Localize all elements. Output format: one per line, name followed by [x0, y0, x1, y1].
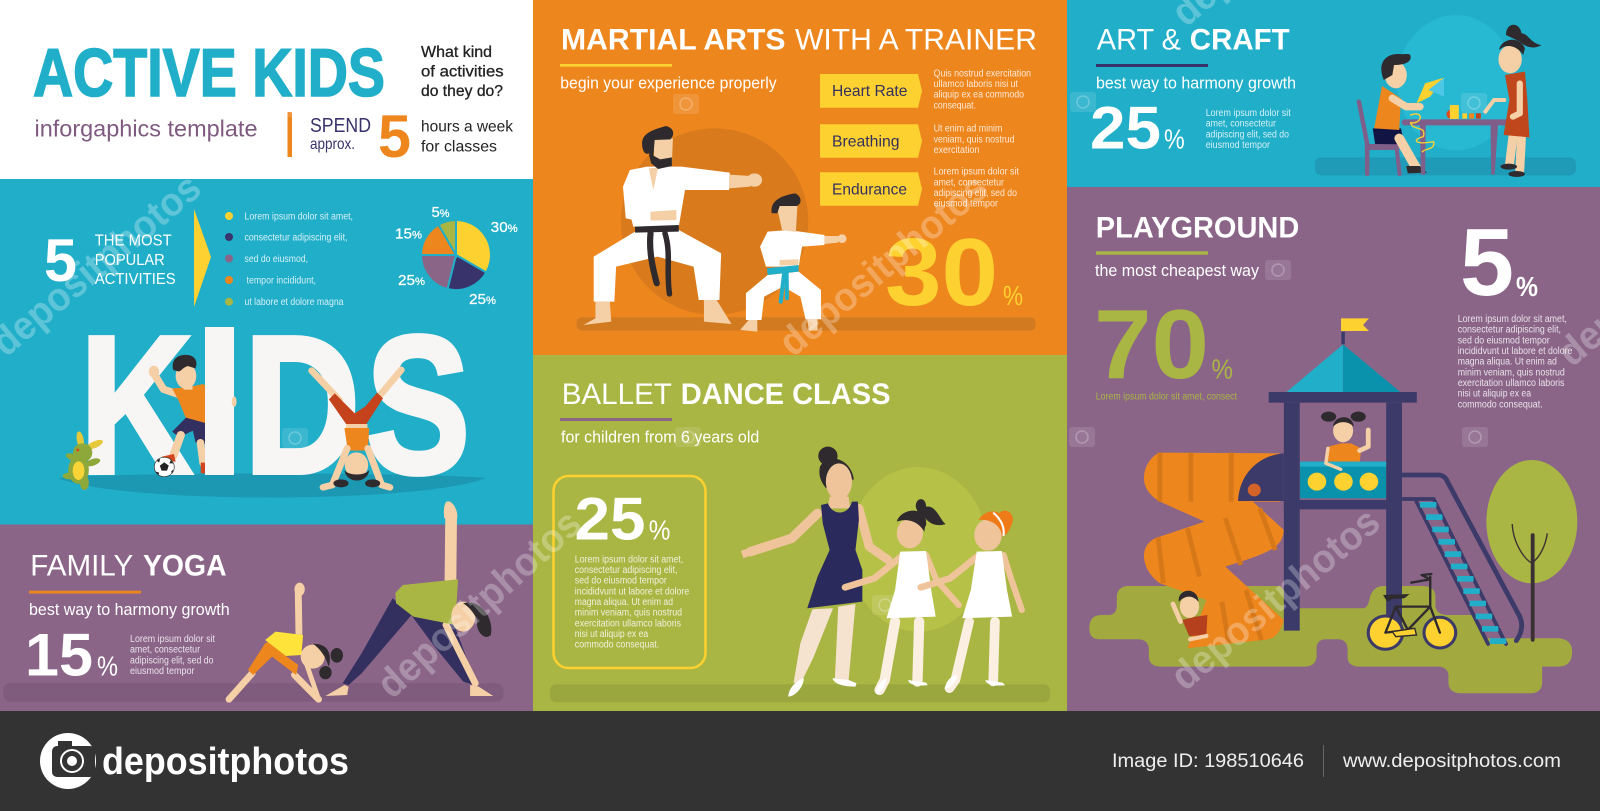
tag: breathing: Breathing [832, 134, 900, 151]
icon: children crafting at table [1315, 15, 1576, 177]
callout box: commodo consequat. [575, 640, 659, 651]
heading: BALLET [562, 378, 672, 411]
letters I D S: S [366, 296, 470, 514]
pie labels: 25% [469, 291, 496, 308]
orange divider [288, 112, 292, 157]
description: breathing: Ut enim ad minim [934, 124, 1002, 135]
slide [1144, 453, 1284, 648]
description: heart rate [934, 68, 1031, 111]
description [1206, 108, 1291, 151]
heading: WITH A TRAINER [795, 23, 1037, 56]
stat 70%: 70 [1094, 289, 1209, 399]
tag: endurance [820, 172, 922, 206]
heading [30, 549, 227, 582]
description: minim veniam, quis nostrud [1458, 367, 1565, 378]
description: adipiscing elit, sed do [130, 655, 214, 666]
stat 15%: % [97, 651, 118, 682]
pie labels: 30% [491, 219, 518, 236]
popular activities heading: ACTIVITIES [95, 271, 176, 288]
description: heart rate: aliquip ex ea commodo [934, 90, 1024, 101]
ladder and rails [1403, 475, 1522, 644]
question text: do they do? [421, 83, 503, 100]
spend label: SPEND [310, 115, 371, 137]
footer bar [0, 711, 1600, 811]
stat 5%: 5 [1460, 209, 1514, 316]
stat 15%: 15 [25, 622, 93, 689]
description: amet, consectetur [1206, 119, 1277, 130]
letter K: K [80, 296, 192, 514]
heading [1097, 23, 1290, 56]
panel: martial arts [533, 0, 1067, 355]
underline [1096, 64, 1208, 67]
callout box [554, 476, 706, 668]
stat 5%: % [1516, 271, 1538, 302]
description: endurance [934, 167, 1019, 210]
callout box: magna aliqua. Ut enim ad [575, 597, 673, 608]
hours text: for classes [421, 138, 497, 155]
icon: ballet teacher and students [550, 447, 1050, 702]
boy at slide exit [1173, 591, 1207, 639]
ground shadow [58, 474, 486, 498]
tree [1486, 460, 1577, 642]
legend: Lorem ipsum dolor sit amet, [244, 212, 353, 222]
hours text: hours a week [421, 119, 514, 136]
image id: Image ID: 198510646 [1112, 751, 1304, 772]
tag: heart rate: Heart Rate [832, 83, 907, 100]
callout box: sed do eiusmod tempor [575, 576, 667, 587]
stat 30%: % [1003, 280, 1023, 311]
big number 5: 5 [378, 103, 411, 170]
callout box: incididvunt ut labore et dolore [575, 586, 690, 597]
description: Lorem ipsum dolor sit [1206, 108, 1291, 119]
subheading: the most cheapest way [1095, 262, 1260, 280]
icon: karate trainer and child [576, 126, 1036, 332]
question text [421, 44, 504, 100]
underline [1096, 251, 1208, 255]
watermark overlay: depositphotos [1163, 499, 1388, 699]
heading: MARTIAL ARTS [561, 23, 786, 56]
description: heart rate: consequat. [934, 100, 976, 111]
subheading: begin your experience properly [560, 74, 777, 92]
spend label [310, 115, 371, 153]
heading [561, 23, 1037, 56]
legend: ut labore et dolore magna [244, 297, 344, 308]
letters I D S: D [244, 296, 360, 514]
title: ACTIVE KIDS [33, 35, 385, 111]
tag: heart rate [820, 74, 922, 108]
description: nisi ut aliquip ex ea [1458, 389, 1531, 400]
stat 30%: 30 [885, 219, 998, 326]
legend: tempor incididunt, [246, 276, 316, 286]
subheading: for children from 6 years old [561, 429, 759, 447]
subheading: best way to harmony growth [1096, 74, 1296, 92]
description: heart rate: ullamco laboris nisi ut [934, 79, 1018, 90]
description [130, 634, 215, 677]
tower [1238, 318, 1417, 633]
heading: FAMILY [30, 549, 133, 582]
logo wordmark: depositphotos [102, 741, 349, 783]
tag: endurance: Endurance [832, 181, 907, 198]
description: endurance: eiusmod tempor [934, 199, 999, 210]
callout box: exercitation ullamco laboris [575, 618, 681, 629]
heading [562, 378, 890, 411]
description: amet, consectetur [130, 645, 201, 656]
callout box: 25 [574, 485, 646, 552]
description: commodo consequat. [1458, 399, 1543, 410]
panel: playground [1067, 187, 1600, 711]
panel: header [0, 0, 533, 179]
heading: YOGA [143, 549, 227, 582]
tag: breathing [820, 124, 922, 158]
description: eiusmod tempor [1206, 140, 1271, 151]
panel: art and craft [1067, 0, 1600, 187]
girl in tower [1321, 412, 1368, 463]
heading: CRAFT [1190, 23, 1290, 56]
popular activities heading: THE MOST [95, 233, 172, 250]
letters I D S [205, 296, 470, 514]
website: www.depositphotos.com [1342, 751, 1561, 772]
caption: Lorem ipsum dolor sit amet, consect [1096, 391, 1237, 402]
heading: PLAYGROUND [1096, 211, 1299, 244]
pie labels: 5% [432, 204, 450, 221]
underline [560, 418, 672, 421]
stat 25%: % [1164, 123, 1185, 154]
stat 5% [1460, 209, 1538, 316]
description [1458, 314, 1573, 410]
underline [29, 591, 141, 594]
callout box: minim veniam, quis nostrud [575, 608, 682, 619]
subheading: best way to harmony growth [29, 601, 230, 619]
yellow arrow [194, 209, 211, 307]
spend label: approx. [310, 136, 355, 153]
underline [560, 64, 672, 67]
description: heart rate: Quis nostrud exercitation [934, 68, 1031, 79]
pie labels [395, 204, 518, 308]
pie labels: 15% [395, 226, 422, 243]
callout box: nisi ut aliquip ex ea [575, 629, 649, 640]
popular activities heading [95, 233, 176, 288]
description: magna aliqua. Ut enim ad [1458, 357, 1557, 368]
description: eiusmod tempor [130, 666, 195, 677]
watermark overlay: depositphotos [369, 501, 590, 707]
description: consectetur adipiscing elit, [1458, 325, 1561, 336]
panel: most popular activities and kids lettering [0, 179, 533, 525]
stat 25%: 25 [1090, 94, 1161, 161]
description: incididvunt ut labore et dolore [1458, 346, 1573, 357]
divider [1323, 745, 1324, 777]
heading: DANCE CLASS [681, 378, 890, 411]
panel: family yoga [0, 501, 533, 712]
legend: sed do eiusmod, [244, 254, 308, 265]
icon: camera logo [40, 733, 96, 789]
description: breathing: exercitation [934, 145, 979, 156]
description: endurance: adipiscing elit, sed do [934, 188, 1017, 199]
grass [1089, 586, 1572, 693]
description: adipiscing elit, sed do [1206, 129, 1289, 140]
heading: ART & [1097, 23, 1181, 56]
callout box: consectetur adipiscing elit, [575, 565, 678, 576]
question text: of activities [421, 64, 504, 81]
stat 70%: % [1212, 354, 1233, 385]
watermark overlay: depositphotos [771, 165, 996, 365]
pie chart [421, 220, 491, 290]
bicycle [1368, 574, 1456, 649]
subtitle: inforgaphics template [34, 116, 258, 142]
icon: boy with ball [149, 355, 207, 477]
pie labels: 25% [398, 272, 425, 289]
description: Lorem ipsum dolor sit amet, [1458, 314, 1567, 325]
icon: bunny toy and handstand girl [63, 370, 401, 490]
big number 5 white: 5 [44, 227, 77, 294]
description: endurance: amet, consectetur [934, 177, 1005, 188]
description: breathing [934, 124, 1014, 156]
legend: consectetur adipiscing elit, [244, 232, 348, 244]
description: sed do eiusmod tempor [1458, 335, 1550, 346]
tower window [1300, 448, 1386, 498]
description: exercitation ullamco laboris [1458, 378, 1564, 389]
description: breathing: veniam, quis nostrud [934, 134, 1014, 145]
callout box: Lorem ipsum dolor sit amet, [575, 554, 683, 565]
description: endurance: Lorem ipsum dolor sit [934, 167, 1019, 178]
popular activities heading: POPULAR [95, 252, 165, 269]
hours text [421, 119, 514, 155]
question text: What kind [421, 44, 492, 61]
panel: ballet dance class [533, 355, 1067, 711]
description: Lorem ipsum dolor sit [130, 634, 215, 645]
legend [225, 212, 353, 308]
icon: playground scene [1089, 318, 1577, 693]
callout box: % [649, 514, 670, 545]
icon: yoga family [3, 501, 504, 702]
